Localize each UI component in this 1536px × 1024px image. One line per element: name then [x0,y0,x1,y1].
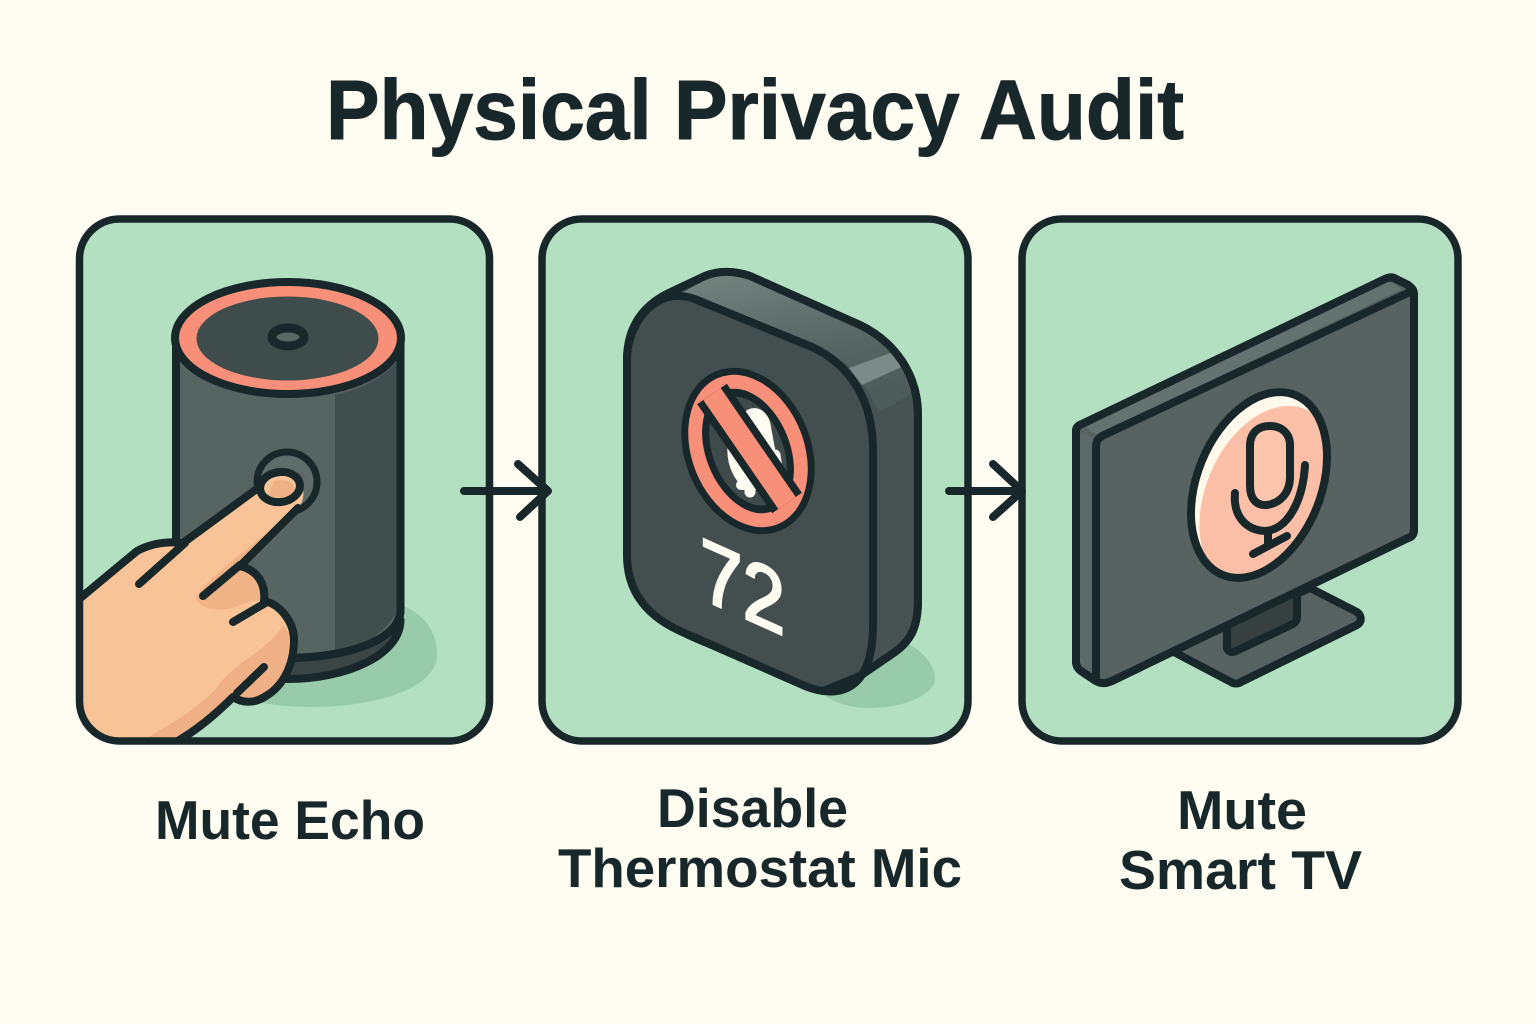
thermostat device [627,272,918,692]
label: disable thermostat mic: Disable [657,777,848,839]
infographic canvas [76,77,1462,890]
muted microphone icon [657,348,839,554]
label: disable thermostat mic [558,777,962,899]
label: mute smart tv: Smart TV [1119,839,1362,901]
microphone badge [1187,388,1331,582]
arrow: step 2 to step 3 [949,464,1022,517]
tv screen [1076,278,1414,683]
label: mute smart tv [1119,779,1362,901]
label: disable thermostat mic: Thermostat Mic [558,837,962,899]
label: mute smart tv: Mute [1177,779,1307,841]
label: mute echo: Mute Echo [155,789,425,851]
smart speaker [175,282,401,679]
speaker shadow [240,603,437,707]
temperature reading: 72 [700,519,785,656]
thermostat shadow [822,640,935,708]
arrow: step 1 to step 2 [464,464,548,517]
panel: mute smart tv [1022,219,1458,741]
title: Physical Privacy Audit [326,63,1184,157]
pointing hand [78,469,303,742]
panel: disable thermostat mic [542,219,968,741]
tv stand [1170,588,1361,684]
panel: mute echo [78,219,490,742]
